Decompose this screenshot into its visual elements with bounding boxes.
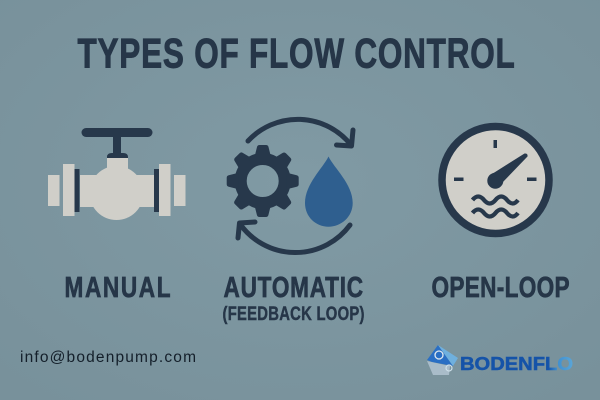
logo: bodenflo	[427, 345, 573, 375]
title: TYPES OF FLOW CONTROL	[78, 29, 515, 77]
label: automatic: AUTOMATIC	[224, 270, 363, 304]
icon: gauge	[442, 126, 549, 234]
contact email: info@bodenpump.com	[20, 349, 196, 366]
icon: manual valve	[48, 128, 186, 220]
label: open-loop: OPEN-LOOP	[432, 270, 570, 304]
label: manual: MANUAL	[64, 270, 171, 304]
arrow: clockwise top	[248, 119, 353, 146]
label: feedback loop: (FEEDBACK LOOP)	[222, 303, 364, 324]
icon: gear	[227, 145, 299, 217]
icon: gear, water drop and feedback arrows	[227, 119, 353, 253]
icon: logo mark	[427, 345, 458, 375]
logo wordmark: BODENFLO	[460, 354, 573, 374]
arrow: clockwise bottom	[238, 222, 350, 253]
icon: water drop	[305, 156, 353, 227]
